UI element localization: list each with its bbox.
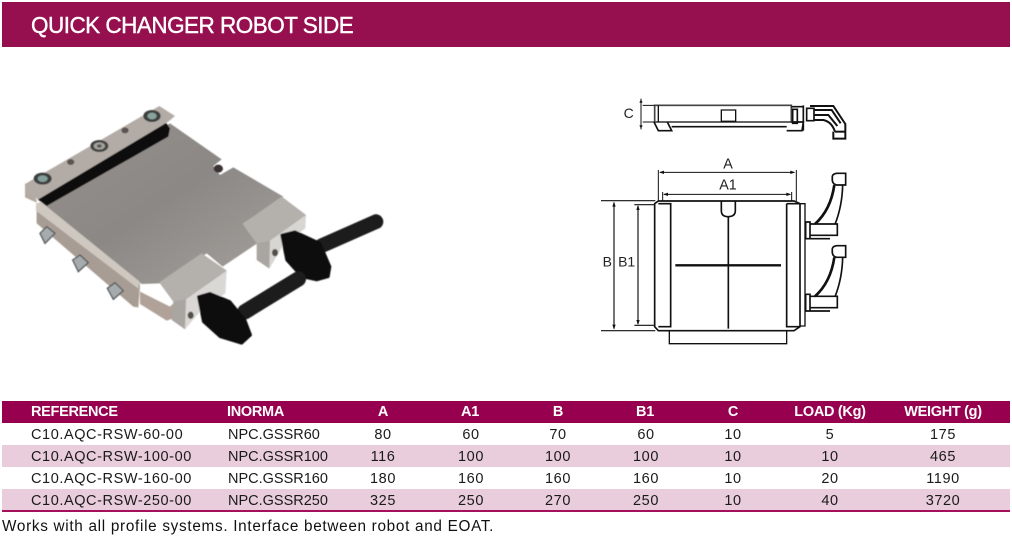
dimension C	[641, 99, 655, 129]
row: 60: 80	[374, 427, 392, 443]
handle lower	[806, 246, 846, 311]
rail screws	[34, 110, 161, 185]
table header: C	[728, 404, 738, 420]
table header: INORMA	[227, 404, 284, 420]
product photo: quick changer	[25, 106, 376, 343]
table header: REFERENCE	[31, 404, 118, 420]
row: 250: 250	[458, 493, 484, 509]
row: 100: 10	[724, 449, 742, 465]
row: 250: 325	[370, 493, 396, 509]
table header	[2, 401, 1010, 423]
table header: B	[553, 404, 563, 420]
rail end and lower body	[25, 183, 140, 307]
rear clamp block	[243, 197, 306, 269]
table header: LOAD (Kg)	[794, 404, 866, 420]
plate notch hole	[214, 165, 223, 173]
row: 160: 160	[633, 471, 659, 487]
row: 60: 60	[637, 427, 655, 443]
row: 160: 10	[724, 471, 742, 487]
row: 160: 180	[370, 471, 396, 487]
row: 60: 10	[724, 427, 742, 443]
dimension A: A	[723, 157, 733, 173]
dimension A	[658, 157, 796, 201]
table header: B1	[636, 404, 654, 420]
row: 60: 175	[930, 427, 956, 443]
table header: A1	[461, 404, 479, 420]
black shadow strip	[38, 123, 170, 206]
row: 100	[2, 445, 1010, 467]
row: 60: 60	[462, 427, 480, 443]
row: 100: NPC.GSSR100	[228, 449, 328, 465]
rear lever handle	[282, 222, 376, 280]
row: 160: 160	[458, 471, 484, 487]
side view: C	[624, 105, 634, 121]
row: 250: 10	[724, 493, 742, 509]
row: 160	[31, 471, 960, 487]
table header: A	[378, 404, 388, 420]
row: 60: NPC.GSSR60	[228, 427, 320, 443]
row: 250: 250	[633, 493, 659, 509]
row: 160: 160	[545, 471, 571, 487]
footnote: Works with all profile systems. Interface between robot and EOAT.	[2, 518, 494, 535]
row: 100: 116	[371, 449, 395, 465]
table header: WEIGHT (g)	[904, 404, 982, 420]
dimension B	[601, 201, 655, 331]
title banner	[2, 2, 1010, 47]
side studs	[40, 227, 123, 299]
row: 60: 5	[826, 427, 834, 443]
row: 160: 20	[821, 471, 839, 487]
dimension B: B	[603, 254, 612, 270]
front clamp block	[159, 253, 227, 329]
handle upper	[806, 173, 846, 239]
plate top surface	[37, 123, 283, 284]
front edge strip	[36, 202, 139, 288]
row: 60: C10.AQC-RSW-60-00	[31, 427, 183, 443]
row: 250: 270	[545, 493, 571, 509]
row: 100: 100	[633, 449, 659, 465]
row: 100: 465	[930, 449, 956, 465]
dimension B1	[618, 205, 655, 325]
row: 250	[2, 489, 1010, 510]
title: QUICK CHANGER ROBOT SIDE	[31, 12, 353, 38]
technical drawing	[601, 99, 846, 344]
top view outline	[655, 201, 805, 344]
front lever handle	[198, 279, 298, 343]
top rail surface	[25, 106, 175, 199]
row: 250: C10.AQC-RSW-250-00	[31, 493, 192, 509]
row: 160: C10.AQC-RSW-160-00	[31, 471, 192, 487]
row: 100: 100	[458, 449, 484, 465]
side view	[624, 99, 845, 139]
row: 250: 40	[821, 493, 839, 509]
row: 100: C10.AQC-RSW-100-00	[31, 449, 192, 465]
row: 60: 70	[549, 427, 567, 443]
row: 100: 100	[545, 449, 571, 465]
dimension A1	[663, 178, 792, 201]
row: 250: 3720	[926, 493, 960, 509]
dimension A1: A1	[719, 178, 737, 194]
data table	[2, 401, 1010, 512]
row: 100: 10	[821, 449, 839, 465]
dimension B1: B1	[618, 254, 635, 270]
row: 160: 1190	[926, 471, 960, 487]
row: 60	[31, 427, 956, 443]
row: 250: NPC.GSSR250	[228, 493, 328, 509]
row: 160: NPC.GSSR160	[228, 471, 328, 487]
